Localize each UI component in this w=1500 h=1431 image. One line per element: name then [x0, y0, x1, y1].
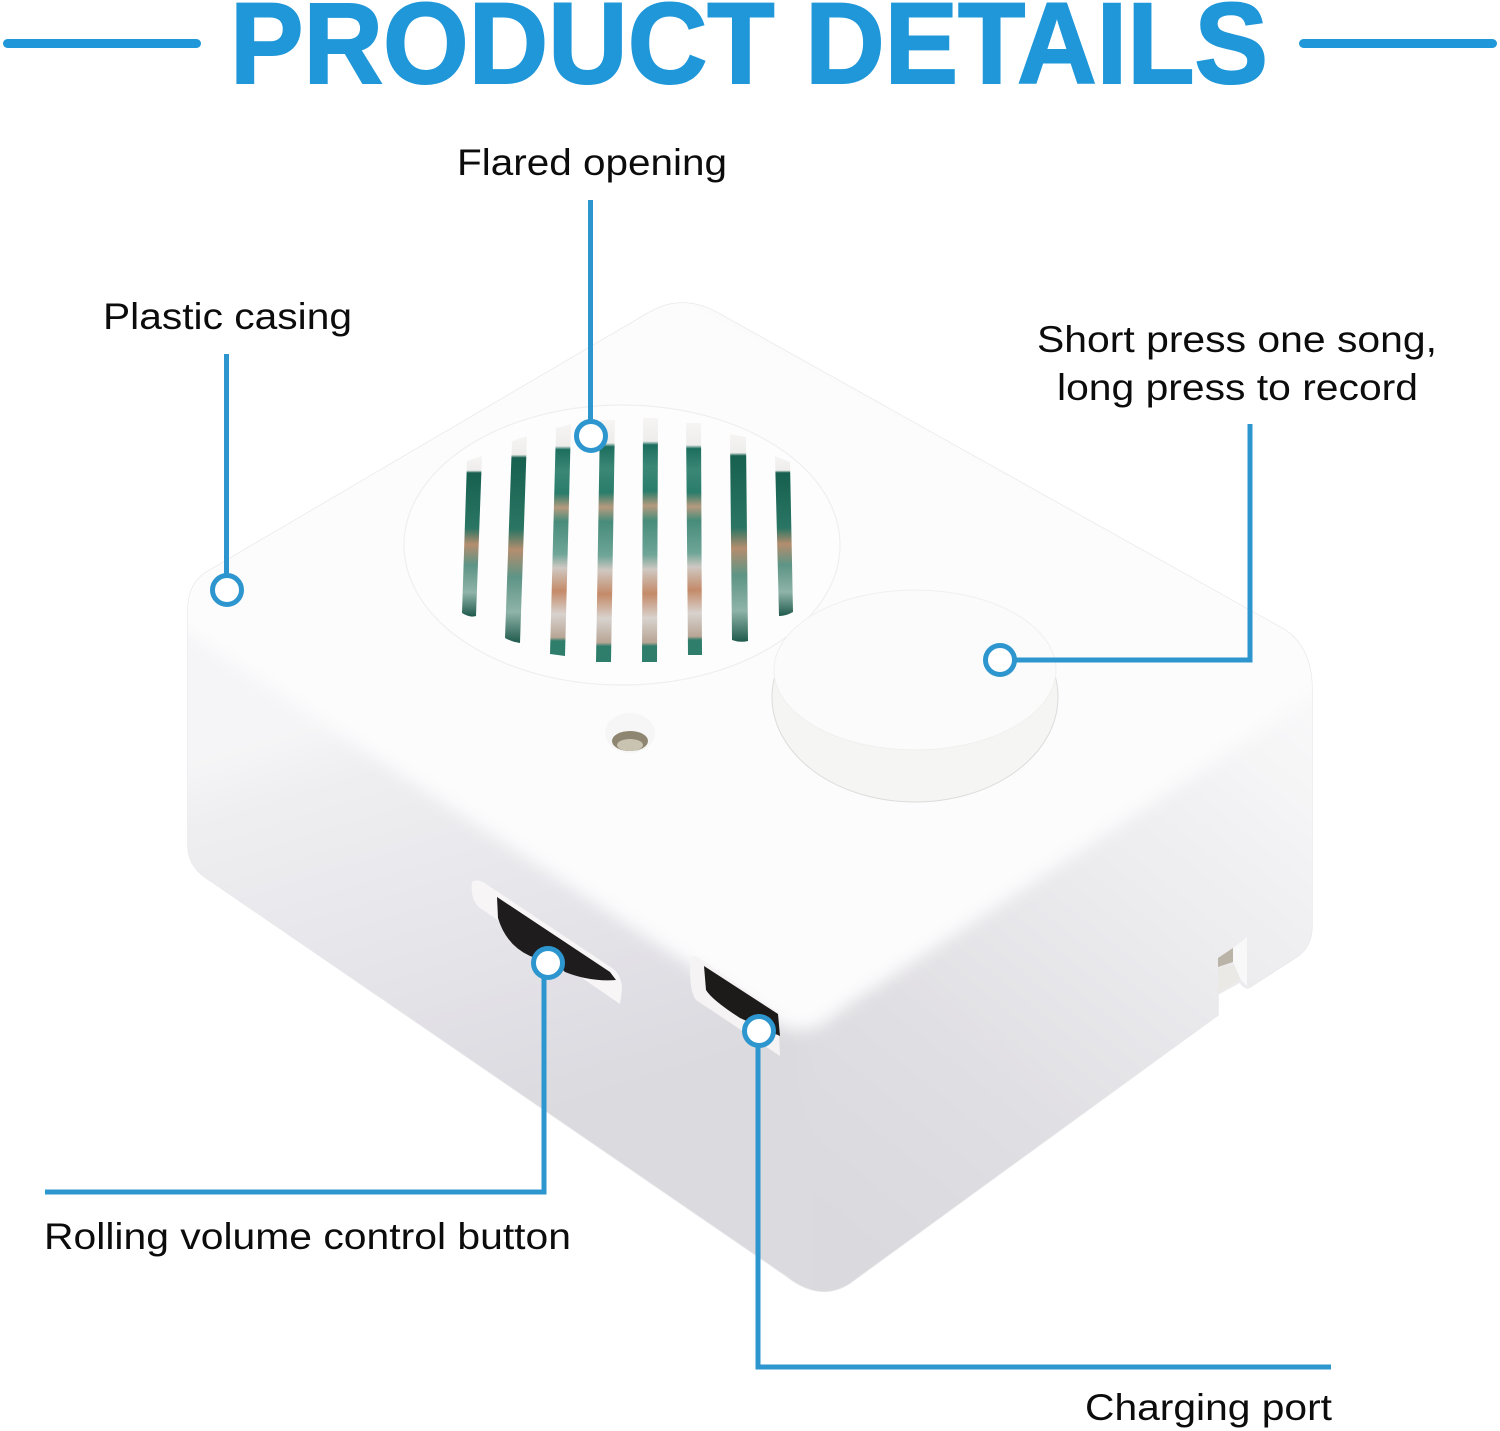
charging port: [690, 956, 780, 1056]
callout: charging port: Charging port: [1085, 1387, 1333, 1428]
callout: rolling volume control: [44, 948, 571, 1257]
round button: [772, 590, 1058, 802]
volume wheel slot: [472, 880, 622, 1004]
callout: short press button: [986, 319, 1437, 674]
microphone hole: [605, 713, 655, 753]
callout: charging port: [744, 1016, 1333, 1428]
flared opening recess: [404, 405, 840, 685]
callout: flared opening: [457, 142, 727, 450]
callout: plastic casing: [103, 296, 352, 604]
callout: flared opening: Flared opening: [457, 142, 727, 183]
callout: plastic casing: Plastic casing: [103, 296, 352, 337]
callout: short press button: long press to record: [1057, 367, 1418, 408]
speaker slots: [462, 418, 793, 662]
side notch: [1218, 937, 1247, 993]
product photo: white speaker box: [187, 302, 1313, 1292]
callout: short press button: Short press one song,: [1037, 319, 1437, 360]
callout: rolling volume control: Rolling volume control button: [44, 1216, 571, 1257]
